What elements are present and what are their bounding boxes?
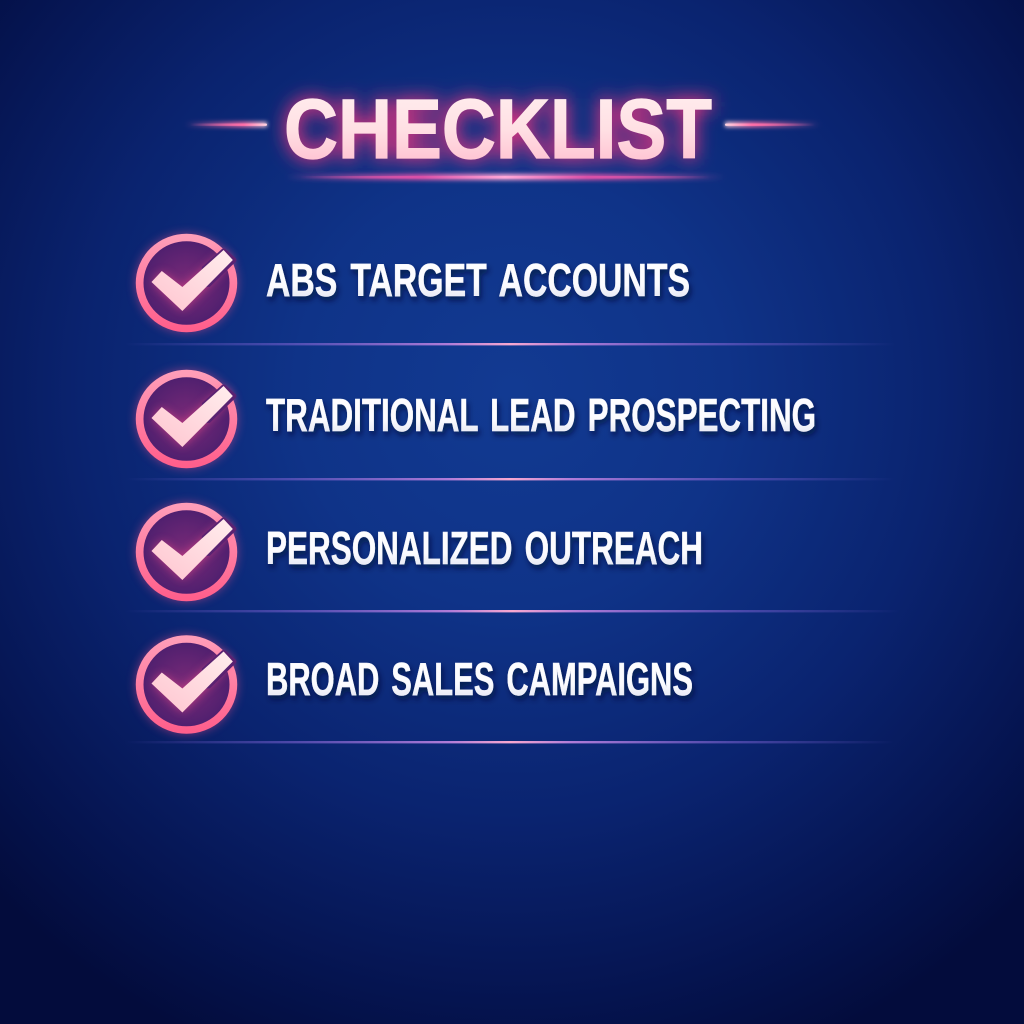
label: broad sales campaigns: BROAD SALES CAMPAIGNS — [266, 653, 693, 705]
title: checklist: CHECKLIST — [284, 82, 712, 176]
divider 2 — [125, 478, 895, 480]
divider 1 — [125, 343, 895, 345]
left title flare — [185, 122, 267, 127]
title: checklist: CHECKLIST — [284, 82, 712, 176]
divider 3 — [125, 610, 900, 612]
icon: check circle 1 — [136, 234, 237, 332]
icon: check circle 4 — [136, 636, 237, 734]
icon: check circle 3 — [136, 503, 237, 601]
label: personalized outreach: PERSONALIZED OUTREACH — [266, 522, 703, 574]
divider 4 — [125, 741, 895, 743]
checklist item 1 — [136, 234, 690, 332]
title underline — [285, 174, 725, 180]
checklist item 4 — [136, 636, 693, 734]
right title flare — [725, 122, 820, 127]
checklist item 3 — [136, 503, 703, 601]
checklist item 2 — [136, 370, 816, 468]
label: ABS target accounts: ABS TARGET ACCOUNTS — [266, 254, 690, 306]
icon: check circle 2 — [136, 370, 237, 468]
